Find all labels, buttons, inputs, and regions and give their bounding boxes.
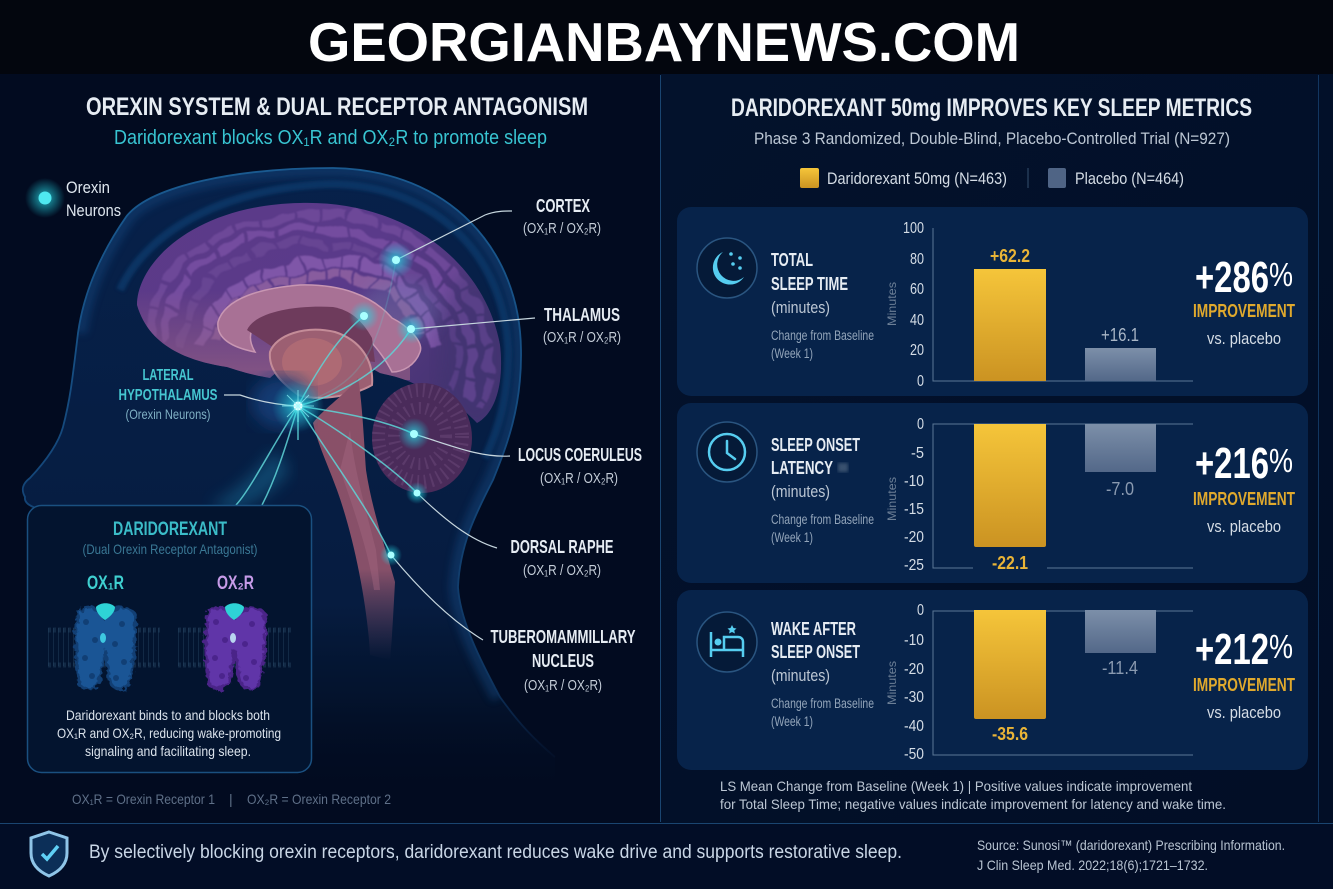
metric title: (minutes) — [771, 482, 830, 501]
improvement stat: IMPROVEMENT — [1193, 675, 1295, 695]
improvement stat — [1193, 625, 1295, 722]
icon: moon — [697, 238, 757, 298]
bar chart: +16.1 — [1101, 325, 1139, 345]
left panel heading: OREXIN SYSTEM & DUAL RECEPTOR ANTAGONISM — [86, 93, 588, 121]
thalamus and midbrain — [270, 330, 372, 398]
improvement stat: +286 — [1195, 253, 1269, 302]
label: cortex — [523, 196, 601, 237]
chart footnote: for Total Sleep Time; negative values indicate improvement for latency and wake time. — [720, 796, 1226, 812]
panel title: DARIDOREXANT — [113, 519, 227, 540]
label: cortex: (OX₁R / OX₂R) — [523, 220, 601, 237]
bar chart: 0 — [917, 373, 924, 390]
improvement stat: +212 — [1195, 625, 1269, 674]
receptor key: OX₁R = Orexin Receptor 1 — [72, 791, 215, 807]
bar chart: 20 — [910, 342, 924, 359]
label: lateral hypothalamus — [118, 367, 218, 422]
bar chart: 60 — [910, 281, 924, 298]
label: cortex: CORTEX — [536, 196, 590, 216]
label: thalamus — [543, 305, 621, 346]
bar chart: 40 — [910, 312, 924, 329]
panel: wake after sleep onset — [677, 590, 1308, 770]
label: lateral hypothalamus: HYPOTHALAMUS — [118, 387, 218, 404]
label: lateral hypothalamus: (Orexin Neurons) — [126, 406, 210, 422]
legend: orexin neurons: Neurons — [66, 201, 121, 220]
chart footnote — [720, 778, 1226, 812]
source — [977, 837, 1285, 873]
head silhouette — [23, 168, 555, 800]
bar chart: -20 — [904, 529, 924, 546]
neural pathways — [236, 260, 417, 555]
left panel heading — [86, 93, 588, 149]
bar chart: Minutes — [885, 282, 899, 326]
improvement stat — [1193, 253, 1295, 348]
header banner: GEORGIANBAYNEWS.COM — [308, 11, 1020, 73]
bar chart: -7.0 — [1106, 479, 1134, 499]
label: tuberomammillary nucleus: TUBEROMAMMILLARY — [490, 627, 636, 647]
panel: sleep onset latency — [677, 403, 1308, 583]
bar chart: -15 — [904, 501, 924, 518]
bar chart: 80 — [910, 251, 924, 268]
improvement stat: % — [1269, 256, 1293, 293]
improvement stat: +216 — [1195, 439, 1269, 488]
source: Source: Sunosi™ (daridorexant) Prescribing Information. — [977, 837, 1285, 853]
receptor: OX2R: OX₂R — [217, 573, 254, 594]
bar chart: -50 — [904, 746, 924, 763]
bar chart: +62.2 — [990, 246, 1030, 266]
panel description: Daridorexant binds to and blocks both — [66, 707, 270, 723]
bar chart: -10 — [904, 473, 924, 490]
source: J Clin Sleep Med. 2022;18(6);1721–1732. — [977, 857, 1208, 873]
metric title: Change from Baseline — [771, 696, 874, 711]
bar chart: 0 — [917, 602, 924, 619]
improvement stat — [1193, 439, 1295, 536]
bar chart: -22.1 — [992, 553, 1028, 573]
corpus callosum — [218, 285, 421, 372]
metric title: Change from Baseline — [771, 512, 874, 527]
improvement stat: % — [1269, 628, 1293, 665]
bar chart: 0 — [917, 416, 924, 433]
receptor key: | — [229, 791, 233, 807]
bar chart: -20 — [904, 661, 924, 678]
receptor: OX2R — [178, 573, 291, 689]
metric title: SLEEP ONSET — [771, 435, 860, 455]
panel description — [57, 707, 281, 759]
icon: clock — [697, 422, 757, 482]
metric title: TOTAL — [771, 250, 813, 270]
bar chart: -11.4 — [1102, 658, 1138, 678]
panel: daridorexant — [28, 506, 312, 772]
label: locus coeruleus: LOCUS COERULEUS — [518, 445, 642, 465]
receptor: OX1R: OX₁R — [87, 573, 124, 594]
bar chart: Minutes — [885, 661, 899, 705]
bar chart: -35.6 — [992, 724, 1028, 744]
metric title: SLEEP ONSET — [771, 642, 860, 662]
header banner — [0, 0, 1333, 74]
panel title: (Dual Orexin Receptor Antagonist) — [82, 541, 258, 557]
bar chart — [885, 220, 1193, 390]
metric title: (minutes) — [771, 298, 830, 317]
label: tuberomammillary nucleus: NUCLEUS — [532, 651, 594, 671]
bar chart: Minutes — [885, 477, 899, 521]
label: dorsal raphe: DORSAL RAPHE — [510, 537, 614, 557]
bar chart: -40 — [904, 718, 924, 735]
metric title — [771, 619, 874, 729]
bar chart: -25 — [904, 557, 924, 574]
label: lateral hypothalamus: LATERAL — [142, 367, 194, 384]
neuron nodes — [272, 242, 430, 566]
panel description: OX₁R and OX₂R, reducing wake-promoting — [57, 725, 281, 741]
label: locus coeruleus — [518, 445, 642, 487]
left panel heading: Daridorexant blocks OX₁R and OX₂R to promote sleep — [114, 127, 547, 149]
label: thalamus: (OX₁R / OX₂R) — [543, 329, 621, 346]
panel: total sleep time — [677, 207, 1308, 396]
metric title — [771, 435, 874, 545]
right panel heading: Phase 3 Randomized, Double-Blind, Placebo-Controlled Trial (N=927) — [754, 129, 1230, 148]
bar chart — [885, 416, 1193, 574]
improvement stat: vs. placebo — [1207, 517, 1281, 536]
illustration: head and brain — [23, 168, 555, 800]
metric title: (Week 1) — [771, 714, 813, 729]
panel title — [82, 519, 258, 557]
icon: bed — [697, 612, 757, 672]
hypothalamus glow region — [252, 376, 312, 428]
brainstem — [313, 378, 395, 660]
bar chart: 100 — [903, 220, 924, 237]
bar chart: -30 — [904, 689, 924, 706]
metric title: (minutes) — [771, 666, 830, 685]
panel description: signaling and facilitating sleep. — [85, 743, 251, 759]
legend: orexin neurons: Orexin — [66, 178, 110, 197]
metric title: SLEEP TIME — [771, 274, 848, 294]
improvement stat: IMPROVEMENT — [1193, 301, 1295, 321]
improvement stat: vs. placebo — [1207, 329, 1281, 348]
metric title: (Week 1) — [771, 346, 813, 361]
improvement stat: % — [1269, 442, 1293, 479]
metric title: (Week 1) — [771, 530, 813, 545]
cerebellum — [372, 383, 472, 493]
metric title: LATENCY — [771, 458, 833, 478]
chart legend: Daridorexant 50mg (N=463) — [827, 169, 1007, 188]
label: locus coeruleus: (OX₁R / OX₂R) — [540, 470, 618, 487]
bar chart: -5 — [911, 445, 924, 462]
legend: orexin neurons — [25, 178, 121, 220]
label: tuberomammillary nucleus — [490, 627, 636, 694]
right panel heading — [731, 94, 1252, 148]
footer message: By selectively blocking orexin receptors, daridorexant reduces wake drive and supports restorative sleep. — [89, 842, 902, 863]
label: dorsal raphe: (OX₁R / OX₂R) — [523, 562, 601, 579]
chart footnote: LS Mean Change from Baseline (Week 1) | Positive values indicate improvement — [720, 778, 1192, 794]
improvement stat: vs. placebo — [1207, 703, 1281, 722]
bar chart — [885, 602, 1193, 763]
metric title: Change from Baseline — [771, 328, 874, 343]
label: thalamus: THALAMUS — [544, 305, 620, 325]
metric title: WAKE AFTER — [771, 619, 856, 639]
label: tuberomammillary nucleus: (OX₁R / OX₂R) — [524, 677, 602, 694]
receptor key: OX₂R = Orexin Receptor 2 — [247, 791, 391, 807]
label: dorsal raphe — [510, 537, 614, 579]
chart legend — [800, 168, 1184, 188]
icon: shield — [31, 832, 67, 876]
bar chart: -10 — [904, 632, 924, 649]
receptor: OX1R — [48, 573, 160, 689]
improvement stat: IMPROVEMENT — [1193, 489, 1295, 509]
receptor key — [72, 791, 391, 807]
chart legend: Placebo (N=464) — [1075, 169, 1184, 188]
footer bar — [0, 823, 1333, 889]
cerebral cortex — [130, 198, 513, 430]
metric title — [771, 250, 874, 361]
callout lines — [224, 211, 535, 640]
